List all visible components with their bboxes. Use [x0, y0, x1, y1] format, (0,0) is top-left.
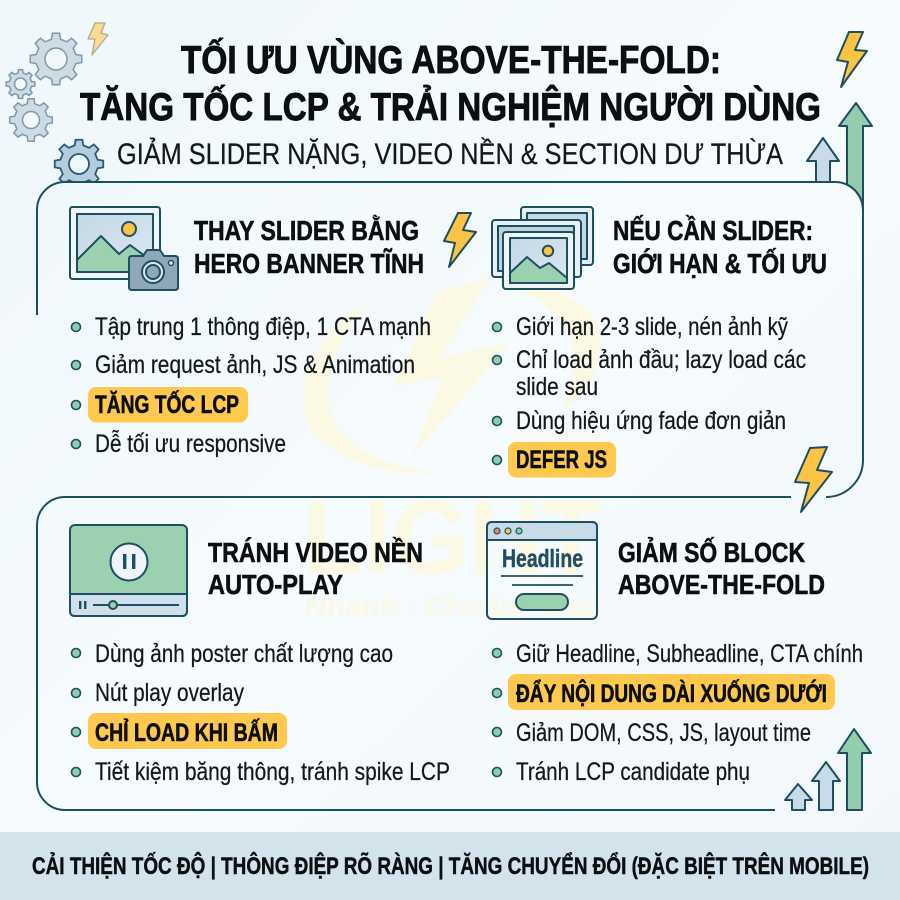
bullet list: Chỉ load ảnh đầu; lazy load các	[516, 346, 806, 374]
bullet list: Giảm request ảnh, JS & Animation	[95, 351, 415, 379]
icon: picture with camera	[70, 207, 178, 290]
icon: gear cluster	[6, 33, 103, 188]
icon: three rising arrows	[785, 729, 871, 810]
icon: lightning top right	[837, 32, 867, 87]
bullet list: CHỈ LOAD KHI BẤM	[95, 717, 278, 747]
panel: static hero banner	[70, 207, 476, 458]
icon: lightning	[444, 213, 476, 267]
heading: AUTO-PLAY	[208, 569, 343, 600]
bullet list: Giới hạn 2-3 slide, nén ảnh kỹ	[516, 313, 788, 341]
arrow: blue, top right	[807, 138, 839, 182]
panel: fewer blocks	[487, 522, 863, 786]
bullet list: DEFER JS	[516, 446, 607, 474]
bullet list: Tập trung 1 thông điệp, 1 CTA mạnh	[95, 313, 431, 341]
icon: browser window: Headline	[502, 545, 583, 573]
heading: THAY SLIDER BẰNG	[194, 215, 419, 246]
bullet list	[492, 313, 806, 478]
bullet list: slide sau	[516, 373, 598, 401]
icon: lightning between panels	[795, 447, 832, 512]
title	[80, 37, 821, 129]
heading	[194, 215, 424, 279]
heading: TRÁNH VIDEO NỀN	[208, 537, 423, 568]
bullet list: Giảm DOM, CSS, JS, layout time	[516, 719, 811, 747]
bullet list: Dùng hiệu ứng fade đơn giản	[516, 407, 786, 435]
bullet list: Tiết kiệm băng thông, tránh spike LCP	[95, 758, 450, 786]
footer band	[0, 832, 900, 900]
icon: browser window	[487, 522, 597, 619]
heading: GIẢM SỐ BLOCK	[618, 536, 805, 568]
heading: ABOVE-THE-FOLD	[618, 569, 825, 600]
bullet list: Dùng ảnh poster chất lượng cao	[95, 640, 393, 668]
icon: small pale lightning	[88, 23, 108, 55]
heading: GIỚI HẠN & TỐI ƯU	[613, 247, 827, 279]
bullet list: Tránh LCP candidate phụ	[516, 758, 750, 786]
heading: NẾU CẦN SLIDER:	[613, 215, 813, 246]
arrow: tall green, top right	[839, 103, 872, 210]
icon: video player	[70, 525, 187, 616]
watermark: LIGHT logo: LIGHT	[303, 480, 602, 596]
panel: slider limits	[492, 207, 827, 478]
bullet list	[72, 640, 450, 786]
heading	[613, 215, 827, 279]
watermark: LIGHT logo	[303, 278, 602, 621]
bullet list	[492, 640, 863, 786]
bullet list: Dễ tối ưu responsive	[95, 429, 286, 458]
bullet list: TĂNG TỐC LCP	[95, 389, 239, 419]
heading: HERO BANNER TĨNH	[194, 248, 424, 279]
bullet list: Nút play overlay	[95, 679, 244, 707]
heading	[208, 537, 423, 600]
icon: stacked pictures	[492, 207, 593, 289]
heading	[618, 536, 825, 600]
watermark: LIGHT logo: Nhanh - Chuẩn - Đẹp	[305, 593, 602, 621]
panel frame: bottom	[37, 497, 791, 810]
bullet list	[72, 313, 431, 458]
panel: avoid autoplay video	[70, 525, 450, 786]
panel frame: top	[37, 182, 863, 497]
subtitle: GIẢM SLIDER NẶNG, VIDEO NỀN & SECTION DƯ THỪA	[117, 137, 783, 171]
title: TỐI ƯU VÙNG ABOVE-THE-FOLD:	[181, 37, 721, 82]
